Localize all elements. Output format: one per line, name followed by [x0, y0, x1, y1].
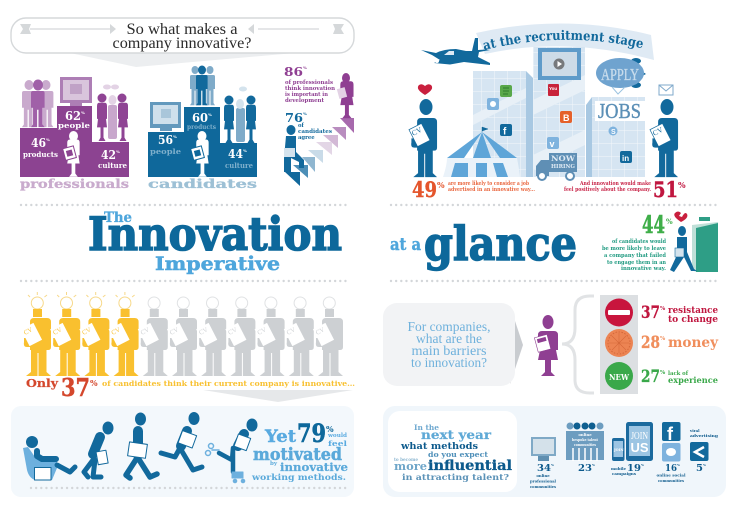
method: online bespoke talent communities 23% — [566, 422, 604, 474]
text: more likely to leave: to engage them in an — [607, 260, 666, 266]
question text block: in attracting talent? — [402, 473, 509, 483]
method: online bespoke talent communities 23%: bespoke talent — [572, 437, 598, 442]
stat: 51%: % — [678, 180, 686, 190]
method: online professional communities 34% — [530, 437, 557, 489]
question text block: do you expect — [428, 450, 489, 459]
buildings — [473, 47, 645, 177]
staircase triangles — [285, 118, 354, 186]
stat: 56% people: people — [150, 147, 181, 156]
question banner: So what makes a company innovative — [11, 18, 354, 67]
icon: woman with CV, white — [63, 131, 80, 177]
stat: only 37%: Only — [26, 377, 59, 390]
text: 86% of professionals: think innovation — [285, 86, 335, 92]
method: online professional communities 34%: 34 — [537, 463, 551, 474]
stat: 28% money: money — [668, 335, 719, 351]
stat: only 37%: % — [90, 378, 98, 388]
callout: for companies question: main barriers — [412, 344, 486, 359]
stat: 51% — [564, 177, 686, 202]
title: The Innovation Imperative: Imperative — [155, 253, 280, 275]
figure: running man — [161, 412, 202, 470]
stat: 49%: 49 — [412, 177, 437, 202]
stat: 56% people: 56 — [158, 132, 173, 147]
icon: woman with CV on stairs — [337, 73, 354, 118]
icon: water cooler chat, blue — [224, 86, 256, 143]
method: mobile campaigns 19%: US — [630, 440, 649, 455]
callout: for companies question: to innovation? — [411, 356, 487, 371]
banner ribbon — [476, 23, 654, 60]
callout: for companies question: what are the — [416, 332, 482, 347]
grey candidates: CV — [315, 326, 326, 337]
grey candidates — [138, 297, 343, 376]
grey candidates: CV — [256, 326, 268, 337]
text: more likely to leave: innovative way. — [621, 266, 666, 272]
icon: group of people, blue — [190, 66, 215, 105]
method: online professional communities 34%: % — [551, 463, 554, 467]
grey candidates: CV — [169, 326, 180, 337]
text: more likely to leave: a company that failed — [604, 253, 666, 259]
social media icons: v — [550, 139, 555, 149]
grey candidates: CV — [286, 326, 297, 337]
stat: 28% money — [641, 333, 719, 353]
icon: man with CV and envelope — [650, 85, 678, 177]
bracket — [562, 296, 594, 393]
icon: walking man with broken heart — [670, 212, 697, 272]
method: viral advertising 5%: advertising — [690, 433, 718, 438]
text: 86% of professionals: development — [285, 98, 325, 104]
yellow candidates, 37 percent: CV — [52, 326, 63, 337]
yellow candidates, 37 percent: CV — [23, 326, 34, 337]
panel: yellow and grey candidates row — [21, 292, 355, 402]
grey candidates: CV — [227, 326, 239, 337]
text: 76% of candidates agree — [285, 110, 332, 141]
icon: man with CV and envelope: CV — [651, 125, 665, 138]
stat: 42% culture — [98, 147, 127, 170]
question text block: to become — [394, 457, 418, 463]
text: 76% of candidates agree: of — [298, 123, 305, 129]
icon: video screen — [540, 50, 579, 78]
icon: purple woman — [534, 315, 558, 376]
stat: 44% culture: culture — [225, 161, 254, 170]
text: 76% of candidates agree: agree — [298, 135, 315, 141]
text: yet 79% would feel motivated by innovative working methods: by — [270, 461, 278, 467]
panel: 79% motivated — [11, 406, 354, 497]
text: yet 79% would feel motivated by innovative working methods: innovative — [280, 461, 348, 474]
method: online social communities 16%: 16 — [665, 463, 677, 474]
method: mobile campaigns 19%: % — [641, 463, 644, 467]
text: yet 79% would feel motivated by innovative working methods: Yet — [264, 427, 296, 447]
question text block: next year — [421, 427, 491, 442]
arrow: pointer to next panel — [203, 390, 353, 402]
stat: 49%: are more likely to consider a job — [448, 181, 529, 187]
text: yet 79% would feel motivated by innovative working methods: would — [327, 433, 347, 439]
method: mobile campaigns 19%: campaigns — [612, 471, 636, 476]
JOBS sign: JOBS — [598, 99, 641, 123]
method: online professional communities 34%: professional — [530, 478, 557, 484]
icon: now hiring truck — [536, 153, 577, 180]
stat: 42% culture: % — [116, 149, 120, 154]
question text block: In the — [414, 423, 439, 432]
question text block: influential — [428, 458, 512, 474]
yellow candidates, 37 percent: CV — [110, 326, 122, 337]
social media icons: S — [611, 129, 616, 136]
label: candidates: candidates — [148, 177, 257, 191]
grey strip behind icons — [600, 295, 638, 394]
title: The Innovation Imperative: Innovation — [88, 207, 342, 261]
method: online social communities 16%: communities — [658, 478, 684, 483]
question banner: So what makes a company innovative: So what makes a — [126, 21, 238, 38]
method: online bespoke talent communities 23%: % — [592, 463, 595, 467]
icon: plane — [421, 38, 490, 65]
stat: 62% people: 62 — [65, 108, 81, 123]
panel: professionals podium — [20, 77, 129, 191]
social media icons: f — [503, 126, 507, 138]
stat: only 37% — [26, 373, 355, 402]
icon: apply blimp — [596, 58, 646, 94]
icon: man with CV and heart — [409, 84, 437, 177]
text: more likely to leave: of candidates would — [612, 239, 666, 245]
stat: 60% products: % — [208, 112, 212, 117]
method: online professional communities 34%: communities — [530, 484, 556, 489]
stat: 62% people — [58, 108, 90, 130]
grey candidates: CV — [140, 326, 151, 337]
stat: 51%: 51 — [653, 177, 678, 202]
podium blocks, purple — [20, 106, 129, 177]
icon: apply blimp: APPLY — [601, 65, 639, 84]
panel: at the recruitment stage: at the recruitment stage — [484, 30, 643, 50]
callout: for companies question — [383, 303, 523, 386]
stat: 44% culture: 44 — [228, 146, 243, 161]
stat: 51%: feel positively about the company. — [564, 187, 651, 193]
stat: 28% money: % — [660, 336, 666, 342]
stat: 60% products: 60 — [192, 110, 208, 125]
stat: 44%: % — [666, 217, 673, 226]
question text block — [388, 411, 517, 492]
stat: only 37%: of candidates think their current company is innovative… — [102, 379, 355, 388]
stat: 46% products — [23, 135, 58, 159]
text: yet 79% would feel motivated by innovative working methods: working methods. — [251, 473, 346, 483]
text: more likely to leave — [602, 239, 666, 272]
method: mobile campaigns 19%: JOIN — [613, 448, 624, 452]
method: online bespoke talent communities 23%: online — [578, 432, 592, 437]
method: mobile campaigns 19%: mobile — [611, 466, 627, 471]
icon: man climbing stairs — [284, 125, 304, 172]
title: The Innovation Imperative: The — [104, 210, 132, 226]
text: 86% of professionals: of professionals — [285, 80, 333, 86]
panel: barriers to innovation — [383, 295, 719, 394]
figure: roller skate man with wind-up key — [206, 418, 258, 483]
method: online bespoke talent communities 23%: communities — [574, 442, 596, 447]
method: viral advertising 5%: % — [703, 463, 706, 467]
method: online social communities 16%: online social — [656, 472, 686, 478]
icon: exit door — [692, 217, 718, 272]
figure: slouching man — [84, 422, 114, 477]
icon: now hiring truck: HIRING — [551, 164, 575, 170]
stat: 44%: 44 — [642, 210, 665, 239]
method: viral advertising 5% — [689, 428, 718, 474]
yellow candidates, 37 percent — [21, 292, 139, 376]
text: yet 79% would feel motivated by innovative working methods — [251, 419, 348, 483]
social media icons: B — [563, 113, 570, 123]
social media icons: in — [622, 154, 629, 163]
method: viral advertising 5%: viral — [689, 428, 700, 433]
icon: woman with CV, white — [191, 131, 209, 177]
stat: 42% culture: 42 — [101, 147, 116, 162]
stat: 27% lack of experience: lack of — [668, 371, 689, 377]
method: mobile campaigns 19% — [611, 422, 653, 476]
text: 76% of candidates agree: candidates — [298, 129, 332, 135]
stat: 37% resistance to change: % — [660, 306, 666, 312]
stat: 60% products: products — [187, 123, 216, 131]
icon: water cooler chat, purple — [97, 84, 128, 141]
stat: 28% money: 28 — [641, 333, 660, 353]
question text block: more — [394, 460, 427, 473]
stat: 51%: And innovation would make — [579, 181, 651, 187]
method: online social communities 16%: f — [667, 424, 674, 444]
method: online social communities 16% — [656, 422, 686, 483]
figure: walking man — [126, 412, 157, 478]
method: online social communities 16%: % — [677, 463, 680, 467]
social media icons — [487, 84, 632, 163]
text: 86% of professionals: is important in — [285, 92, 328, 98]
stat: 27% lack of experience: % — [660, 370, 666, 376]
yellow candidates, 37 percent: CV — [81, 326, 93, 337]
title: at a glance: glance — [424, 217, 577, 272]
stat: 49%: % — [437, 180, 445, 190]
social media icons: You — [549, 86, 557, 91]
panel: methods in the next year — [383, 406, 726, 497]
stat: 37% resistance to change — [641, 303, 718, 325]
icon: new badge: NEW — [609, 373, 629, 383]
panel: at the recruitment stage — [408, 24, 686, 202]
text: 86% of professionals: % — [303, 65, 307, 70]
banner text — [484, 40, 645, 50]
text: yet 79% would feel motivated by innovative working methods: 79 — [297, 419, 326, 448]
question banner: So what makes a company innovative: company innovative? — [112, 35, 252, 52]
stat: 62% people: people — [58, 121, 90, 130]
icon: now hiring truck: NOW — [551, 154, 575, 163]
icon: new badge — [605, 362, 633, 390]
icon: coin — [605, 329, 633, 357]
text: yet 79% would feel motivated by innovative working methods: motivated — [253, 445, 342, 465]
callout: for companies question: For companies, — [408, 320, 490, 335]
stat: 46% products: products — [23, 150, 58, 159]
stat: 46% products: 46 — [31, 135, 46, 150]
stat: 46% products: % — [46, 137, 50, 142]
stat: 56% people: % — [173, 134, 177, 139]
figure: man in armchair — [23, 436, 75, 480]
stat: 37% resistance to change: to change — [668, 315, 718, 325]
stat: 62% people: % — [81, 110, 85, 115]
stat: 42% culture: culture — [98, 161, 127, 170]
question text block: what methods — [400, 441, 478, 452]
stat: 44% culture: % — [243, 148, 247, 153]
stat: 56% people — [150, 132, 181, 156]
text: yet 79% would feel motivated by innovative working methods: feel — [328, 439, 347, 448]
stat: 37% resistance to change: resistance — [668, 306, 718, 316]
text: 76% of candidates agree: % — [303, 111, 307, 116]
icon: monitor, blue — [150, 102, 181, 131]
text: 86% of professionals: 86 — [284, 64, 303, 79]
text: 76% of candidates agree: 76 — [285, 110, 303, 125]
panel: staircase stats 86% and 76% — [284, 64, 354, 186]
icon: monitor, purple — [60, 77, 92, 106]
text: more likely to leave: be more likely to leave — [602, 246, 666, 252]
label: professionals: professionals — [20, 177, 129, 191]
stat: 27% lack of experience: experience — [668, 376, 719, 386]
icon: no entry sign — [605, 298, 633, 326]
icon: group of people, purple — [22, 80, 53, 127]
method: mobile campaigns 19%: JOIN — [631, 431, 648, 442]
panel: 44% would leave — [602, 210, 718, 272]
icon: circus tent — [443, 127, 520, 177]
method: mobile campaigns 19%: 19 — [627, 463, 641, 474]
podium blocks, blue — [148, 107, 257, 177]
stat: 27% lack of experience: 27 — [641, 367, 660, 387]
stat: 49% — [412, 177, 535, 202]
panel: candidates podium — [148, 66, 257, 191]
stat: 44% culture — [225, 146, 254, 170]
method: viral advertising 5%: 5 — [696, 463, 703, 474]
title: at a glance: at a — [390, 235, 421, 255]
stat: 27% lack of experience — [641, 367, 719, 387]
text: yet 79% would feel motivated by innovative working methods: % — [326, 424, 334, 434]
text: 86% of professionals — [284, 64, 335, 104]
method: online bespoke talent communities 23%: 23 — [578, 463, 592, 474]
method: online professional communities 34%: online — [536, 473, 550, 478]
stat: only 37%: 37 — [61, 373, 90, 402]
grey candidates: CV — [198, 326, 209, 337]
stat: 37% resistance to change: 37 — [641, 303, 660, 323]
stat: 49%: advertised in an innovative way... — [448, 187, 535, 193]
stat: 60% products — [187, 110, 216, 131]
icon: man with CV and heart: CV — [410, 125, 424, 138]
